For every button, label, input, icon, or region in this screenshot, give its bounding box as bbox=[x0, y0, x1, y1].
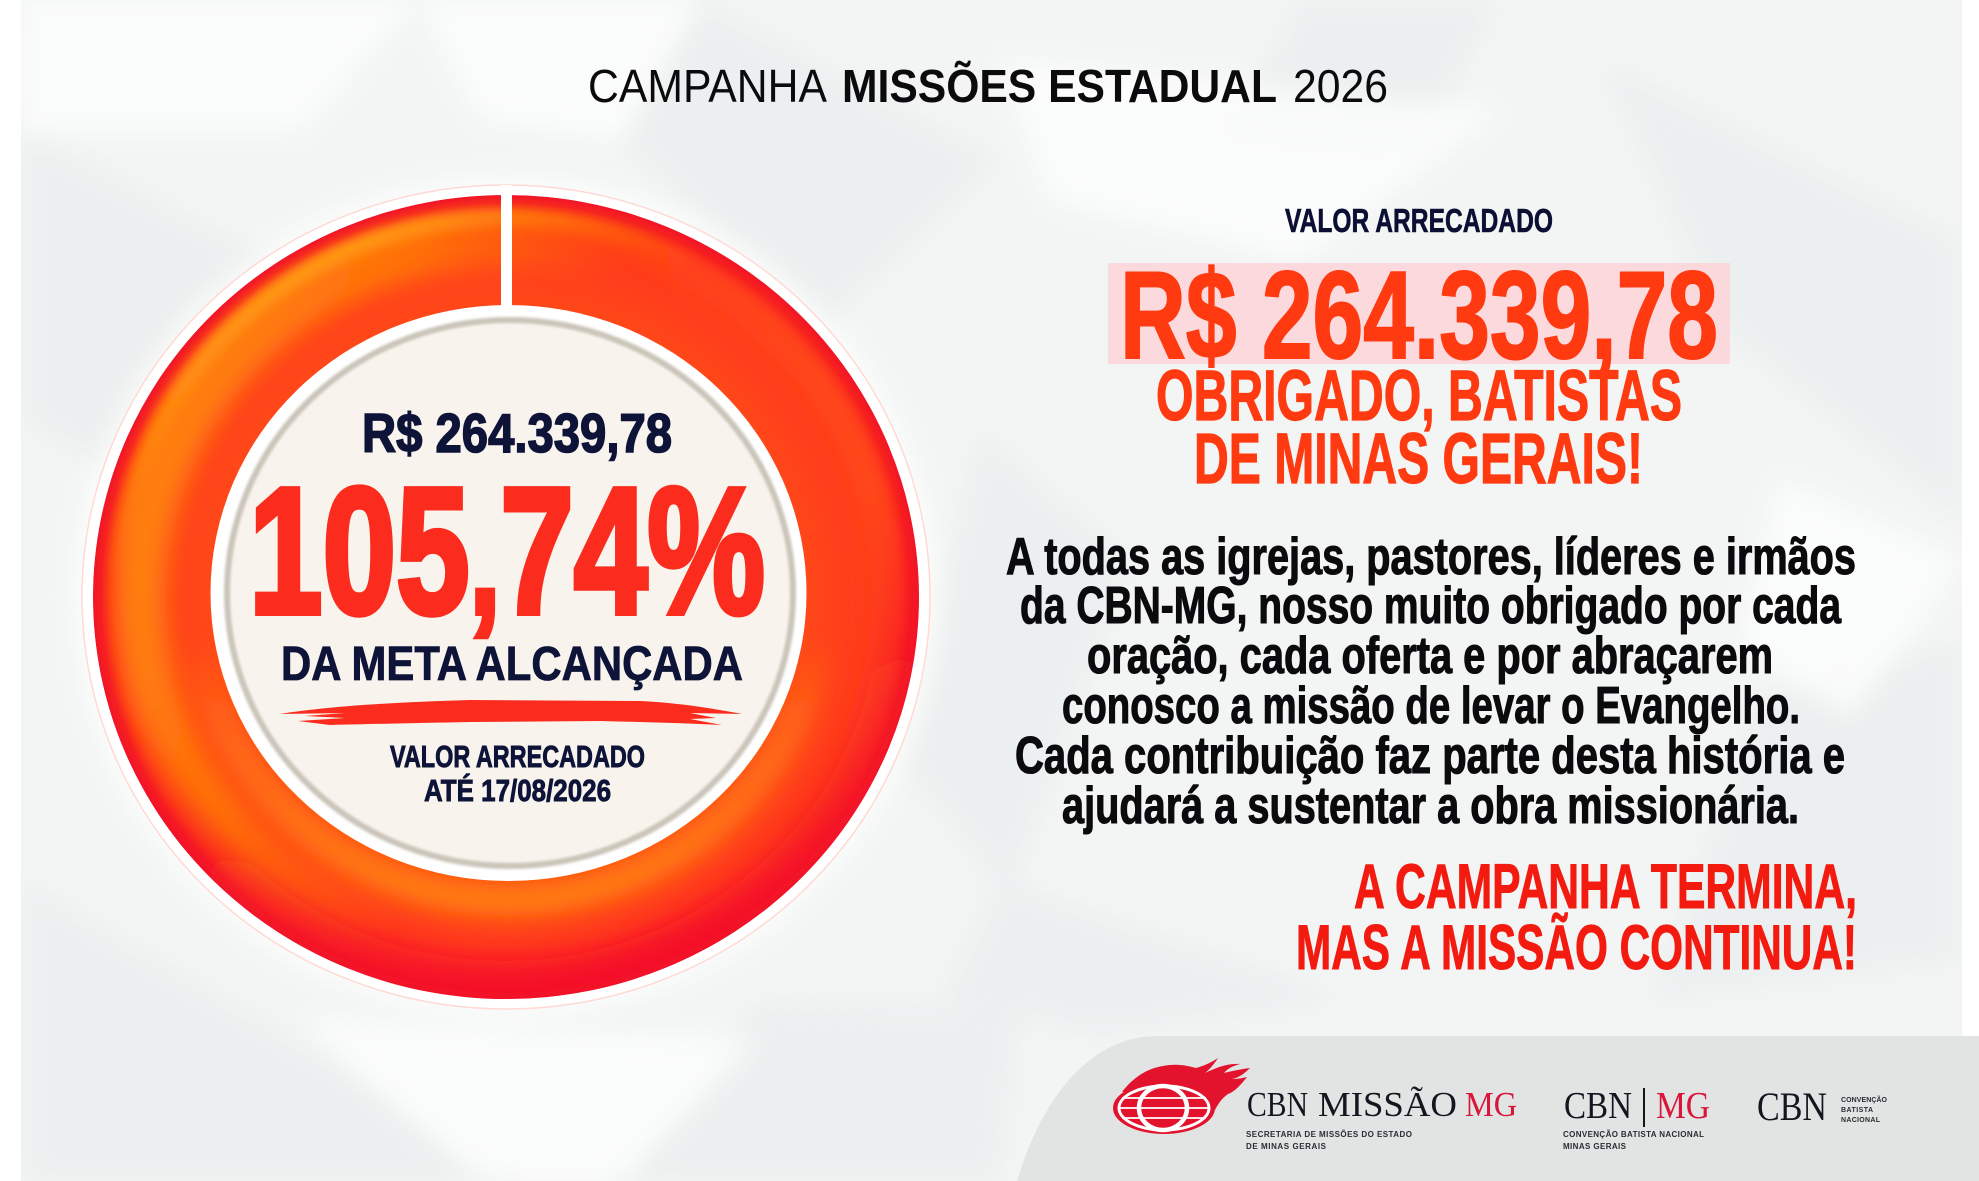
amount: R$ 264.339,78 bbox=[362, 402, 672, 464]
logo: CBN Missão MG: DE MINAS GERAIS bbox=[1246, 1142, 1327, 1151]
logo: CBN Missão MG: SECRETARIA DE MISSÕES DO ESTADO bbox=[1246, 1130, 1412, 1139]
ring red band bbox=[93, 195, 919, 999]
logo: CBN Convenção Batista Nacional: CBN bbox=[1757, 1084, 1827, 1129]
highlight amount: R$ 264.339,78 bbox=[1120, 247, 1718, 385]
brush stroke bbox=[280, 700, 742, 725]
title: CAMPANHA bbox=[588, 60, 827, 112]
title: 2026 bbox=[1293, 60, 1388, 112]
heading: valor arrecadado: VALOR ARRECADADO bbox=[1285, 202, 1553, 239]
logo: CBN MG: CBN bbox=[1564, 1085, 1632, 1127]
ring gap divider bbox=[501, 185, 512, 310]
goal label: DA META ALCANÇADA bbox=[281, 638, 743, 691]
title: MISSÕES ESTADUAL bbox=[842, 60, 1277, 112]
body text: oração, cada oferta e por abraçarem bbox=[1087, 627, 1773, 685]
title bbox=[588, 60, 1388, 112]
logo: CBN Missão MG: CBN bbox=[1247, 1085, 1308, 1124]
body text bbox=[1006, 528, 1856, 835]
date line: ATÉ 17/08/2026 bbox=[424, 773, 611, 808]
logo: CBN MG: CONVENÇÃO BATISTA NACIONAL bbox=[1563, 1130, 1704, 1139]
donut center text bbox=[249, 402, 765, 808]
logo: CBN MG: MG bbox=[1656, 1085, 1710, 1127]
date note: VALOR ARRECADADO bbox=[390, 739, 645, 774]
logo: CBN Convenção Batista Nacional bbox=[1757, 1084, 1888, 1129]
logo: CBN MG: MINAS GERAIS bbox=[1563, 1142, 1627, 1151]
percentage: 105,74% bbox=[249, 451, 765, 652]
thank you heading: DE MINAS GERAIS! bbox=[1194, 420, 1643, 499]
logo: CBN Missão MG bbox=[1113, 1058, 1517, 1151]
ring white border bbox=[82, 185, 930, 1009]
footer band bbox=[1017, 1036, 1979, 1181]
thank you heading: OBRIGADO, BATISTAS bbox=[1156, 357, 1682, 436]
logo: CBN Missão MG: MISSÃO bbox=[1318, 1085, 1457, 1124]
closing message bbox=[1296, 852, 1857, 983]
icon: flaming globe bbox=[1113, 1058, 1250, 1134]
logo: CBN Convenção Batista Nacional: BATISTA bbox=[1841, 1107, 1873, 1114]
ring glow bbox=[74, 177, 938, 1017]
donut chart: progress ring bbox=[74, 177, 938, 1017]
logo: CBN MG bbox=[1563, 1085, 1710, 1151]
logo: CBN Missão MG: MG bbox=[1465, 1085, 1517, 1124]
logo: CBN Convenção Batista Nacional: CONVENÇÃO bbox=[1841, 1095, 1888, 1104]
center disc bbox=[210, 305, 806, 881]
logo: CBN Convenção Batista Nacional: NACIONAL bbox=[1841, 1117, 1881, 1124]
thank you heading bbox=[1156, 357, 1682, 499]
